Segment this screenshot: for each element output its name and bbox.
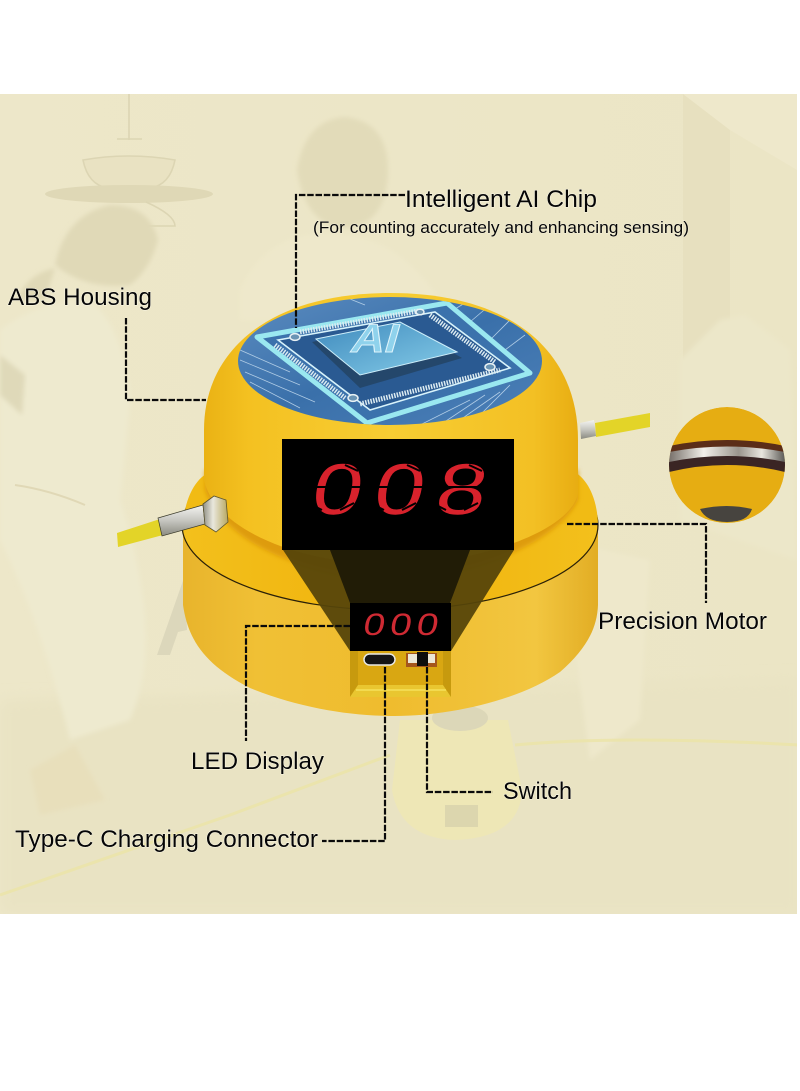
large display digits: 0 [368,450,432,530]
USB Type-C port [364,654,395,665]
small display digits: 0 [414,608,442,642]
right rope and connector [580,413,650,439]
hanging lamp [45,94,213,226]
faint yellow rope [0,740,800,895]
large display digits: 8 [430,450,494,530]
leader line: ABS housing [126,318,206,400]
label: ABS Housing: ABS Housing [8,284,152,311]
slide switch [406,652,437,667]
girl silhouette [0,205,158,738]
motor foot [700,506,752,522]
mounting holes [290,309,495,401]
left rope and connector [117,496,228,547]
label: LED Display: LED Display [191,748,325,775]
label: Type-C Charging Connector: Type-C Charging Connector [15,826,318,853]
small display digits: 0 [361,608,388,642]
central die [312,340,462,388]
background photo panel [0,94,800,914]
wall corner at right [680,94,797,560]
trace lines [240,297,525,425]
ghost unit reflection [392,705,522,840]
ghost letter on wall [157,575,187,655]
label: Intelligent AI Chip: Intelligent AI Chip [405,186,597,213]
pin rows [275,311,500,404]
leader line: precision motor [567,524,706,603]
label: chip description: (For counting accurately and enhancing sensing) [313,218,689,237]
label: Precision Motor: Precision Motor [598,608,767,635]
floor rug [0,680,800,914]
small display digits: 0 [387,608,415,642]
leader line: LED display [246,626,350,741]
glowing board outline [257,303,530,423]
port recess [350,651,451,697]
large display digits: 0 [306,450,370,530]
upper body of the unit [204,293,578,564]
AI lettering: AI [346,317,405,361]
boy silhouette [240,117,650,760]
leader line: switch [427,667,493,792]
large LED display panel [282,439,514,651]
zoomed motor detail circle [669,407,785,523]
chip disc [238,297,542,425]
label: Switch: Switch [503,778,572,805]
leader line: Type-C connector [322,667,385,841]
base of the unit [182,440,598,716]
base ledge with rim line [182,440,598,610]
segment gaps [300,463,500,510]
leader line: AI chip [296,195,405,328]
small LED display [350,603,451,651]
